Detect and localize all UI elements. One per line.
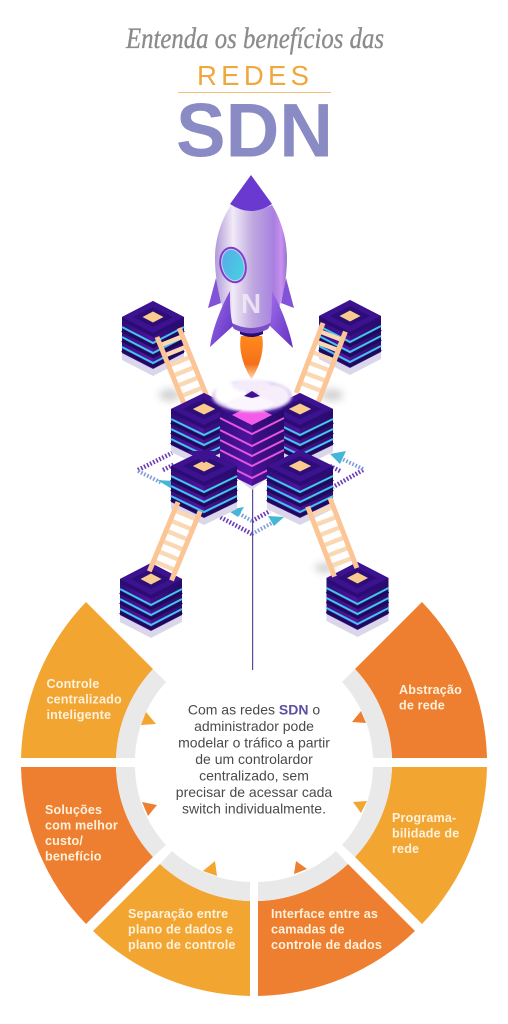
server: upper left — [171, 393, 237, 468]
hull — [215, 205, 287, 330]
segment: Interface entre as camadas de controle de dados: controle de dados — [271, 938, 382, 952]
central text block: de um controlardor — [195, 751, 313, 767]
segment: Controle centralizado inteligente — [21, 602, 166, 758]
segment: Interface entre as camadas de controle de dados: camadas de — [271, 922, 345, 936]
segment: Programabilidade de rede — [342, 767, 487, 924]
hull base band — [230, 322, 272, 334]
dashed flow arrows — [138, 451, 363, 534]
segment: Interface entre as camadas de controle de dados: Interface entre as — [271, 907, 378, 921]
server: lower left — [171, 450, 237, 525]
nose cone — [230, 175, 272, 211]
title: Entenda os benefícios das: Entenda os benefícios das — [125, 22, 384, 55]
segment: Abstração de rede: Abstração — [399, 683, 462, 697]
segment: Separação entre plano de dados e plano de controle: plano de dados e — [128, 922, 233, 936]
central text block: modelar o tráfico a partir — [178, 734, 330, 750]
heading: SDN: SDN — [176, 88, 333, 174]
segment: Separação entre plano de dados e plano de controle — [93, 851, 250, 996]
server: top left — [122, 301, 184, 376]
server: bottom left — [120, 563, 182, 638]
segment: Abstração de rede — [342, 602, 487, 758]
smoke cloud — [212, 380, 292, 412]
segment: Controle centralizado inteligente: inteligente — [46, 708, 111, 722]
segment: Separação entre plano de dados e plano de controle: Separação entre — [128, 907, 228, 921]
central text block: switch individualmente. — [182, 800, 326, 816]
server: lower right — [267, 450, 333, 525]
segment: Soluções com melhor custo/benefício — [21, 767, 166, 924]
server: upper right — [267, 393, 333, 468]
segment: Soluções com melhor custo/benefício: com melhor — [45, 818, 118, 832]
central text block: Com as redes SDN o — [188, 702, 320, 718]
server: bottom right — [326, 562, 388, 637]
rear fins — [208, 278, 294, 308]
central text block: administrador pode — [194, 718, 314, 734]
segment: Soluções com melhor custo/benefício: Soluções — [45, 803, 102, 817]
central magenta server — [220, 393, 284, 490]
panel: ring segments — [21, 602, 487, 996]
rocket — [208, 175, 294, 379]
smoke centre diamond — [244, 391, 260, 398]
segment: Programabilidade de rede: Programa- — [392, 811, 456, 825]
segment: Abstração de rede: de rede — [399, 698, 445, 712]
segment: Soluções com melhor custo/benefício: benefício — [45, 850, 102, 864]
upper server overlap notch — [187, 451, 221, 463]
segment: Programabilidade de rede: rede — [392, 842, 419, 856]
segment: Programabilidade de rede: bilidade de — [392, 826, 459, 840]
heading: REDES: REDES — [197, 60, 309, 91]
ladder: bottom left — [149, 502, 200, 580]
ground shadows — [159, 389, 343, 573]
server: top right — [319, 300, 381, 375]
segment: Separação entre plano de dados e plano de controle: plano de controle — [128, 938, 236, 952]
ladder: bottom right — [308, 498, 357, 577]
nozzle — [240, 328, 263, 337]
rocket N logo: N — [241, 288, 261, 319]
segment: Interface entre as camadas de controle de dados — [258, 851, 415, 996]
segment: Controle centralizado inteligente: Controle — [46, 677, 99, 691]
flame — [240, 336, 263, 379]
ladder: top left — [157, 328, 207, 407]
front fins — [210, 291, 233, 347]
segment: Soluções com melhor custo/benefício: custo/ — [45, 834, 83, 848]
segment: Controle centralizado inteligente: centralizado — [46, 692, 122, 706]
window — [215, 244, 251, 286]
central text block: precisar de acessar cada — [176, 784, 332, 800]
central text block — [176, 702, 332, 816]
central text block: centralizado, sem — [199, 768, 309, 784]
vertical connector line — [252, 480, 253, 670]
ladder: top right — [296, 323, 345, 402]
